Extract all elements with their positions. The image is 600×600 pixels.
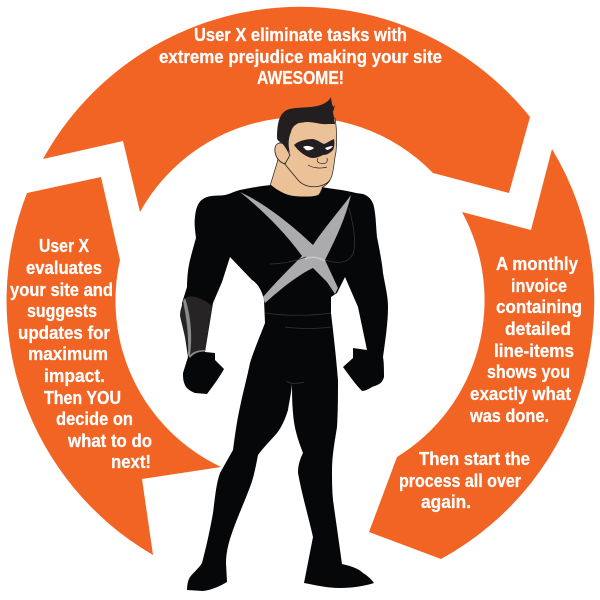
hero neck and face (270, 118, 337, 197)
hero ear (275, 143, 290, 164)
text: evaluates site: maximum (28, 344, 108, 364)
hero eyes (303, 146, 333, 150)
text: eliminate tasks: AWESOME! (257, 68, 344, 88)
text: start again (399, 449, 530, 512)
text: start again: again. (421, 492, 471, 512)
hero bracer highlight (183, 298, 205, 358)
text: evaluates site: your site and (10, 280, 113, 300)
text: monthly invoice: line-items (494, 341, 574, 361)
panel: right arc step (369, 149, 594, 559)
hero chest and waist lines (265, 208, 355, 383)
text: monthly invoice: detailed (505, 319, 571, 339)
text: evaluates site: User X (39, 236, 89, 256)
hero arm bracer (180, 296, 212, 356)
text: evaluates site: impact. (44, 366, 105, 386)
hero chest highlight (305, 257, 325, 261)
text: monthly invoice: exactly what (470, 384, 571, 404)
arc shape: top (43, 7, 530, 212)
text: evaluates site: Then YOU (44, 388, 121, 408)
text: monthly invoice: was done. (469, 406, 549, 426)
arc shape: left (7, 177, 221, 555)
text: evaluates site: next! (111, 452, 151, 472)
panel: top arc step (43, 7, 530, 212)
text: monthly invoice: invoice (511, 276, 567, 296)
hero grey X strap (240, 192, 351, 303)
text: start again: process all over (399, 471, 521, 491)
hero black suit (182, 185, 388, 591)
text: monthly invoice (469, 254, 582, 426)
text: evaluates site (10, 236, 152, 472)
text: monthly invoice: containing (496, 297, 582, 317)
text: eliminate tasks: extreme prejudice making your site (159, 47, 442, 67)
text: monthly invoice: A monthly (496, 254, 578, 274)
text: evaluates site: evaluates (26, 258, 102, 278)
text: eliminate tasks: User X eliminate tasks with (194, 25, 407, 45)
text: monthly invoice: shows you (487, 362, 570, 382)
text: eliminate tasks (159, 25, 442, 88)
hero mask (294, 139, 334, 158)
text: evaluates site: updates for (18, 323, 110, 343)
hero jaw line (284, 163, 330, 187)
icon: masked superhero (180, 97, 388, 591)
text: evaluates site: what to do (67, 431, 152, 451)
text: evaluates site: suggests (27, 301, 97, 321)
hero nose and smile (308, 158, 327, 168)
text: start again: Then start the (419, 449, 530, 469)
panel: left arc step (7, 177, 221, 555)
hero hair (277, 97, 335, 153)
arc shape: right (369, 149, 594, 559)
text: evaluates site: decide on (56, 409, 133, 429)
